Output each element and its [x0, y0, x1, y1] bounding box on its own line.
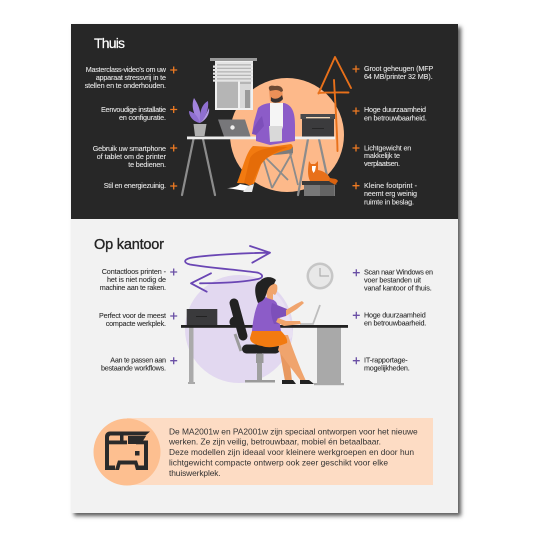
list: thuis right: neemt erg weinig — [364, 189, 417, 198]
list: kantoor right — [364, 268, 433, 373]
list: thuis left: of tablet om de printer — [97, 152, 167, 161]
list: thuis right: verplaatsen. — [364, 159, 400, 168]
icon: window with blinds — [210, 58, 257, 110]
printer — [187, 309, 217, 325]
list: kantoor right: Hoge duurzaamheid — [364, 310, 426, 319]
list: kantoor right: vanaf kantoor of thuis. — [364, 284, 432, 293]
sketch: purple arrow swirl — [185, 246, 270, 292]
printer — [300, 114, 335, 136]
list: thuis right — [364, 64, 434, 206]
heading: Thuis: Thuis — [94, 35, 125, 51]
list: kantoor right: IT-rapportage- — [364, 356, 408, 365]
list: thuis left: Stil en energiezuinig. — [104, 181, 166, 190]
text block: lichtgewicht compacte ontwerp ook zeer geschikt voor elke — [169, 458, 388, 468]
list: thuis left: apparaat stressvrij in te — [96, 73, 166, 82]
stool — [262, 147, 298, 188]
icons: orange plus left — [170, 66, 177, 190]
list: kantoor left: Aan te passen aan — [110, 355, 166, 364]
laptop — [300, 305, 320, 324]
list: kantoor left: het is niet nodig de — [107, 275, 166, 284]
panel: op kantoor — [94, 237, 433, 385]
list: thuis left — [85, 65, 167, 190]
list: kantoor right: voer bestanden uit — [364, 276, 421, 285]
office chair — [230, 303, 280, 382]
icons: purple plus right — [353, 269, 360, 364]
icons: purple plus left — [170, 268, 177, 364]
list: kantoor left: machine aan te raken. — [100, 283, 166, 292]
list: thuis right: Hoge duurzaamheid — [364, 105, 426, 114]
list: thuis right: Groot geheugen (MFP — [364, 64, 434, 73]
list: thuis left: stellen en te onderhouden. — [85, 81, 166, 90]
list: thuis right: 64 MB/printer 32 MB). — [364, 72, 433, 81]
text block: werken. Ze zijn veilig, betrouwbaar, mobiel én betaalbaar. — [168, 436, 381, 446]
list: thuis left: Gebruik uw smartphone — [93, 144, 166, 153]
callout: product summary — [94, 418, 433, 486]
list: thuis left: Masterclass-video's om uw — [86, 65, 167, 74]
text block: Deze modellen zijn ideaal voor kleinere werkgroepen en door hun — [169, 447, 414, 457]
list: kantoor left: bestaande workflows. — [101, 363, 166, 372]
desk — [182, 136, 335, 195]
icons: orange plus right — [352, 66, 360, 189]
desk — [181, 325, 348, 385]
list: kantoor left: compacte werkplek. — [106, 319, 166, 328]
list: kantoor right: Scan naar Windows en — [364, 268, 433, 277]
text block: De MA2001w en PA2001w zijn speciaal ontworpen voor het nieuwe — [169, 426, 418, 436]
page sheet with shadow — [71, 24, 458, 513]
illustration: woman working at office — [181, 246, 348, 385]
cat on a box — [302, 161, 338, 196]
sketch: orange roof lines — [318, 57, 351, 151]
illustration: man working at home — [182, 57, 351, 196]
list: thuis right: Kleine footprint - — [364, 181, 418, 190]
icon: wall clock — [306, 262, 334, 290]
text block: thuiswerkplek. — [169, 468, 221, 478]
list: thuis left: te bedienen. — [128, 160, 166, 169]
icon: plant — [189, 98, 209, 136]
list: kantoor right: en betrouwbaarheid. — [364, 318, 426, 327]
list: kantoor left — [99, 267, 167, 372]
list: thuis right: ruimte in beslag. — [364, 197, 414, 206]
list: thuis left: en configuratie. — [119, 113, 166, 122]
woman — [250, 277, 314, 384]
list: thuis right: en betrouwbaarheid. — [364, 113, 427, 122]
man — [227, 86, 295, 192]
panel: thuis — [71, 24, 458, 219]
icon: printer — [105, 432, 150, 470]
list: kantoor left: Contactloos printen - — [102, 267, 167, 276]
list: thuis right: Lichtgewicht en — [364, 143, 411, 152]
list: thuis right: makkelijk te — [364, 151, 400, 160]
laptop — [218, 120, 250, 136]
list: kantoor right: mogelijkheden. — [364, 364, 410, 373]
list: thuis left: Eenvoudige installatie — [101, 105, 166, 114]
text block — [168, 426, 418, 478]
heading: Op kantoor: Op kantoor — [94, 237, 164, 253]
list: kantoor left: Perfect voor de meest — [99, 311, 166, 320]
